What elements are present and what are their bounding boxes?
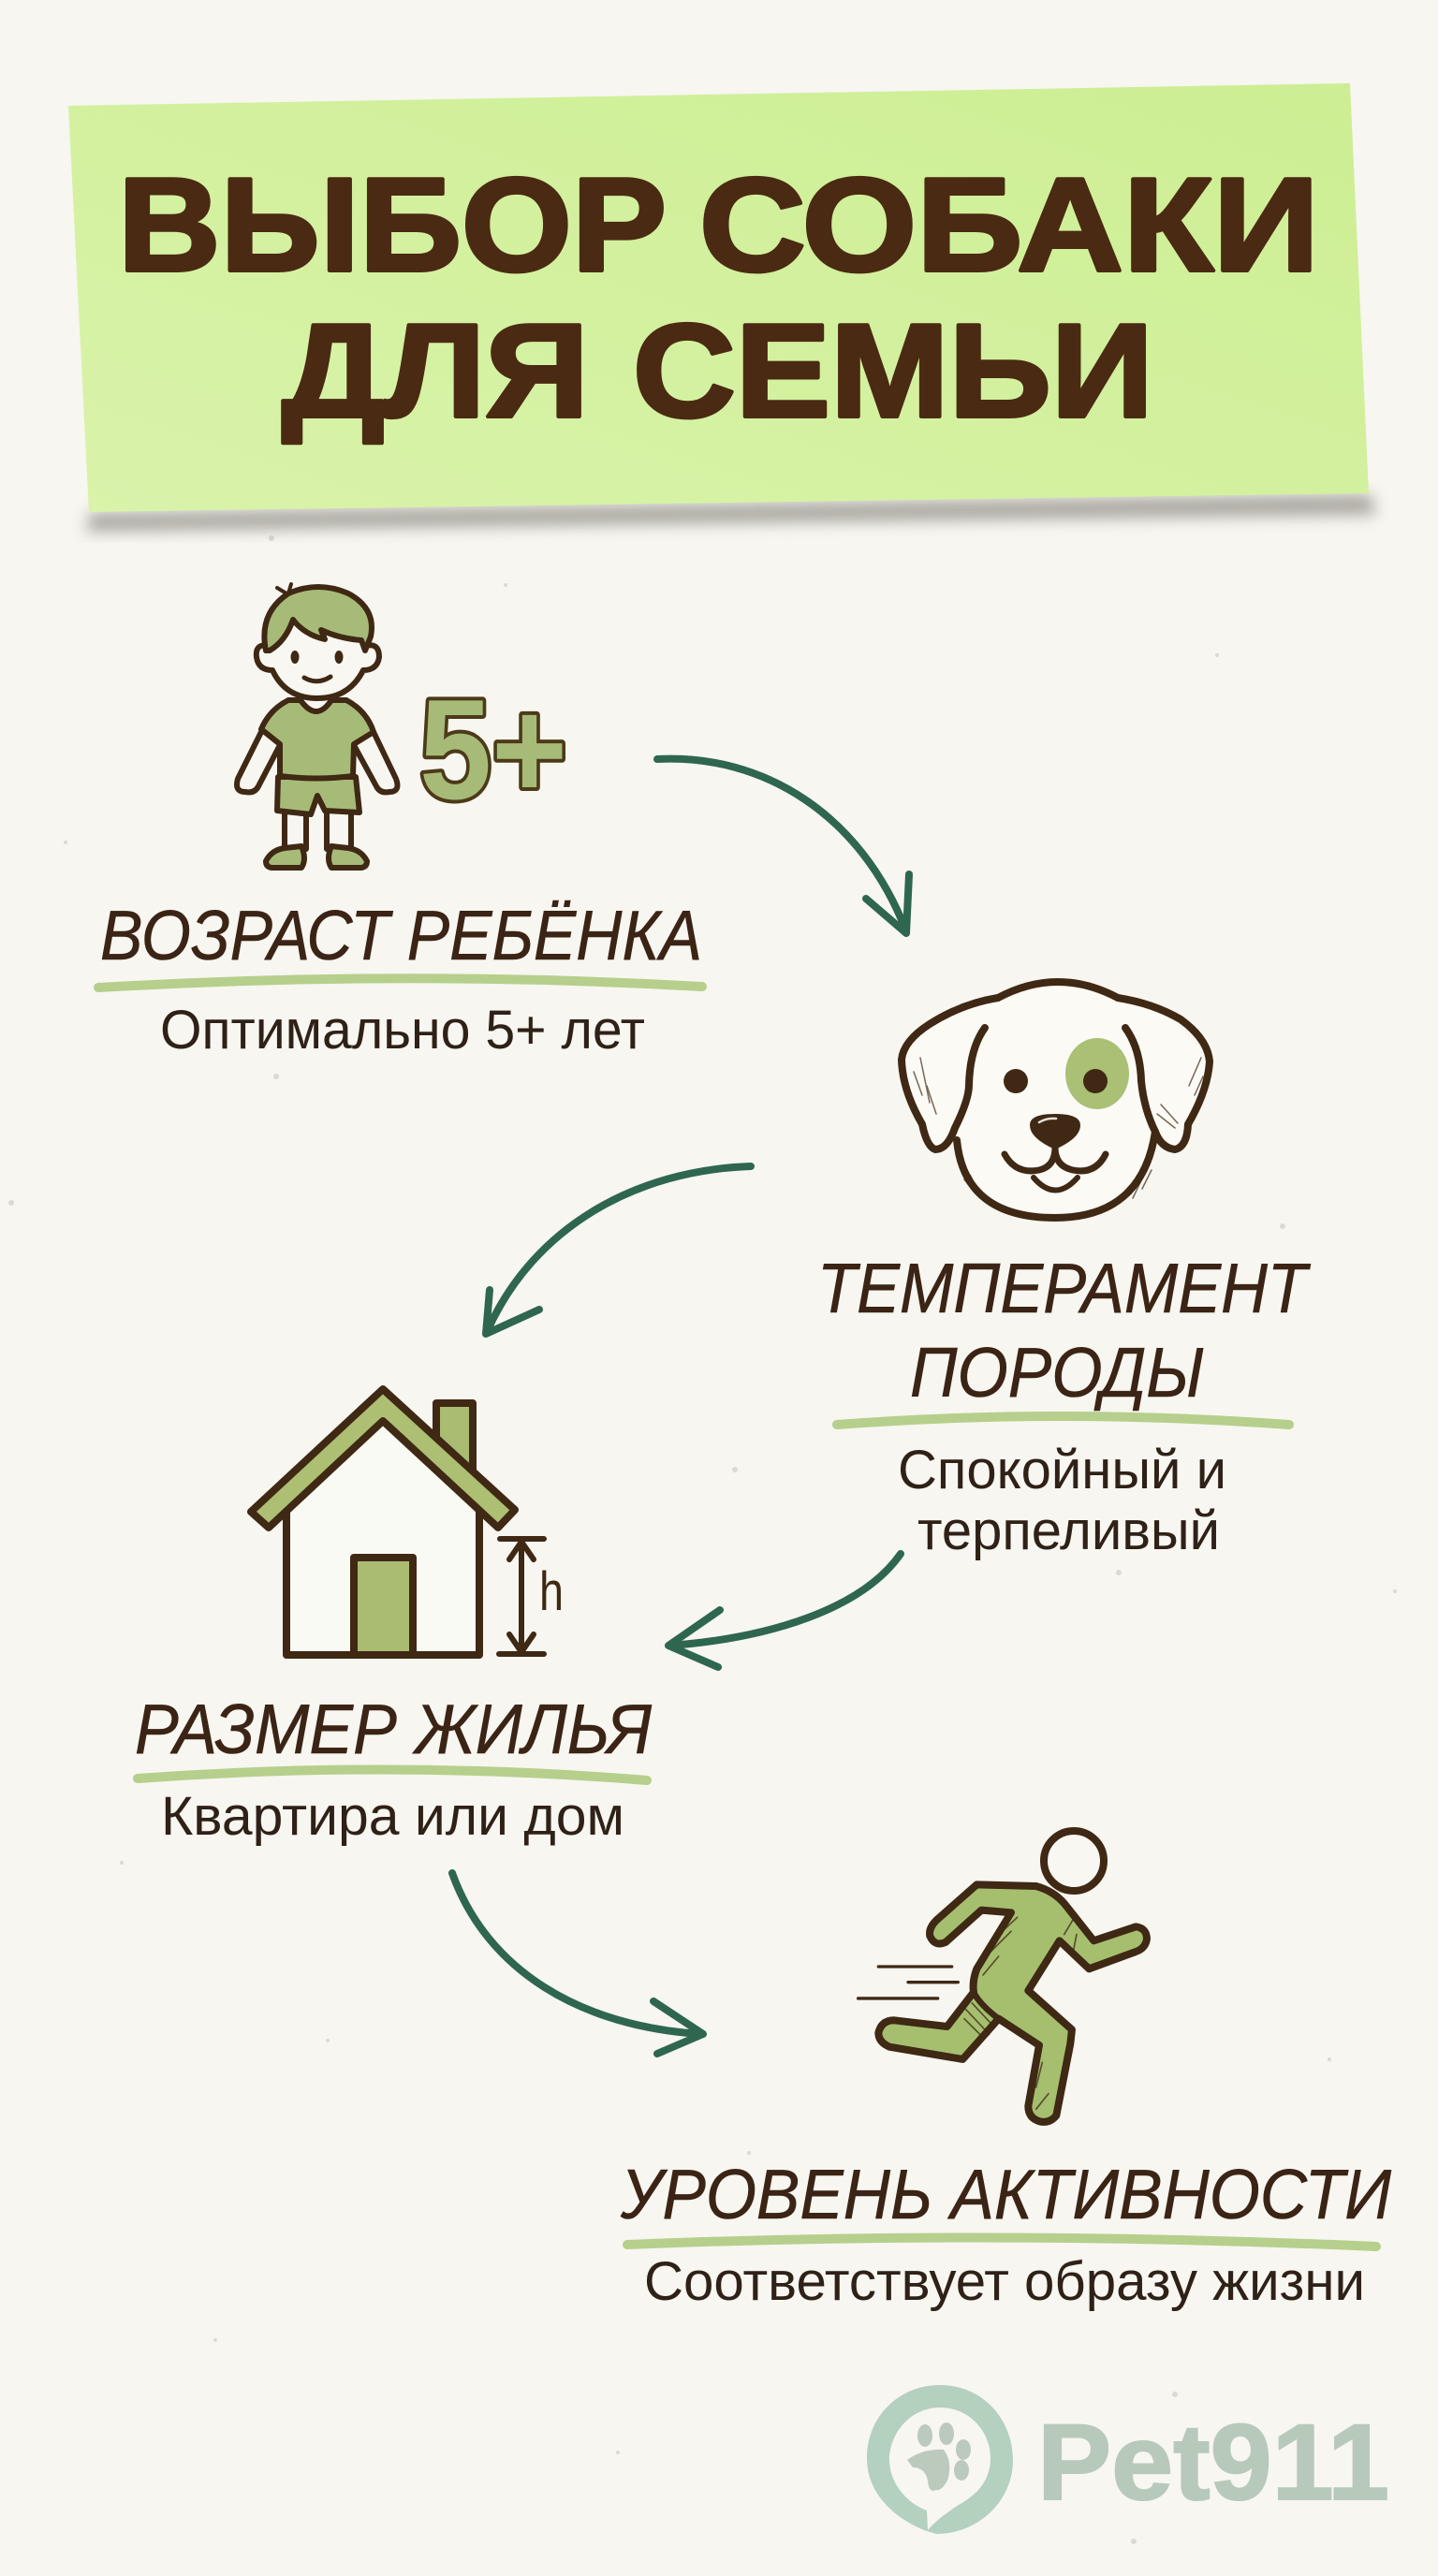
arrow 4 <box>452 1873 703 2054</box>
arrow 3 <box>668 1554 901 1667</box>
icon: child <box>237 584 397 868</box>
title text: ВЫБОР <box>118 151 667 300</box>
title text: ДЛЯ <box>282 297 589 446</box>
title text <box>118 151 1319 446</box>
heading: home size: РАЗМЕР ЖИЛЬЯ <box>135 1690 653 1768</box>
icon: 5+: 5+ <box>419 670 567 829</box>
title text: СОБАКИ <box>699 151 1319 300</box>
title text: СЕМЬИ <box>633 297 1153 446</box>
icon: house: h <box>539 1561 564 1622</box>
step 3: home size <box>135 1389 653 1847</box>
heading: breed temperament <box>817 1249 1312 1412</box>
underline: child age <box>98 978 702 988</box>
text: breed temperament: Спокойный и <box>898 1440 1226 1500</box>
step 2: breed temperament <box>817 982 1312 1561</box>
wordmark: Pet911 <box>1037 2403 1389 2523</box>
heading: breed temperament: ТЕМПЕРАМЕНТ <box>817 1249 1312 1327</box>
arrow 2 <box>486 1166 751 1334</box>
heading: breed temperament: ПОРОДЫ <box>910 1333 1204 1412</box>
icon: speech bubble with paw <box>867 2385 1013 2534</box>
step 4: activity level <box>620 1831 1391 2312</box>
heading: child age: ВОЗРАСТ РЕБЁНКА <box>100 896 702 974</box>
underline: breed temperament <box>837 1416 1289 1425</box>
text: activity level: Соответствует образу жизни <box>644 2251 1365 2312</box>
text: breed temperament: терпеливый <box>917 1500 1220 1561</box>
underline: activity level <box>627 2237 1376 2247</box>
step 1: child age <box>98 584 702 1061</box>
logo: Pet911 <box>867 2385 1389 2534</box>
text: breed temperament <box>898 1440 1226 1561</box>
icon: runner <box>858 1831 1147 2122</box>
heading: activity level: УРОВЕНЬ АКТИВНОСТИ <box>620 2155 1391 2233</box>
icon: house <box>251 1389 564 1655</box>
underline: home size <box>138 1769 647 1780</box>
title panel <box>68 83 1376 532</box>
icon: dog <box>902 982 1210 1218</box>
arrow 1 <box>657 759 909 933</box>
text: home size: Квартира или дом <box>161 1786 624 1847</box>
text: child age: Оптимально 5+ лет <box>160 1000 645 1061</box>
